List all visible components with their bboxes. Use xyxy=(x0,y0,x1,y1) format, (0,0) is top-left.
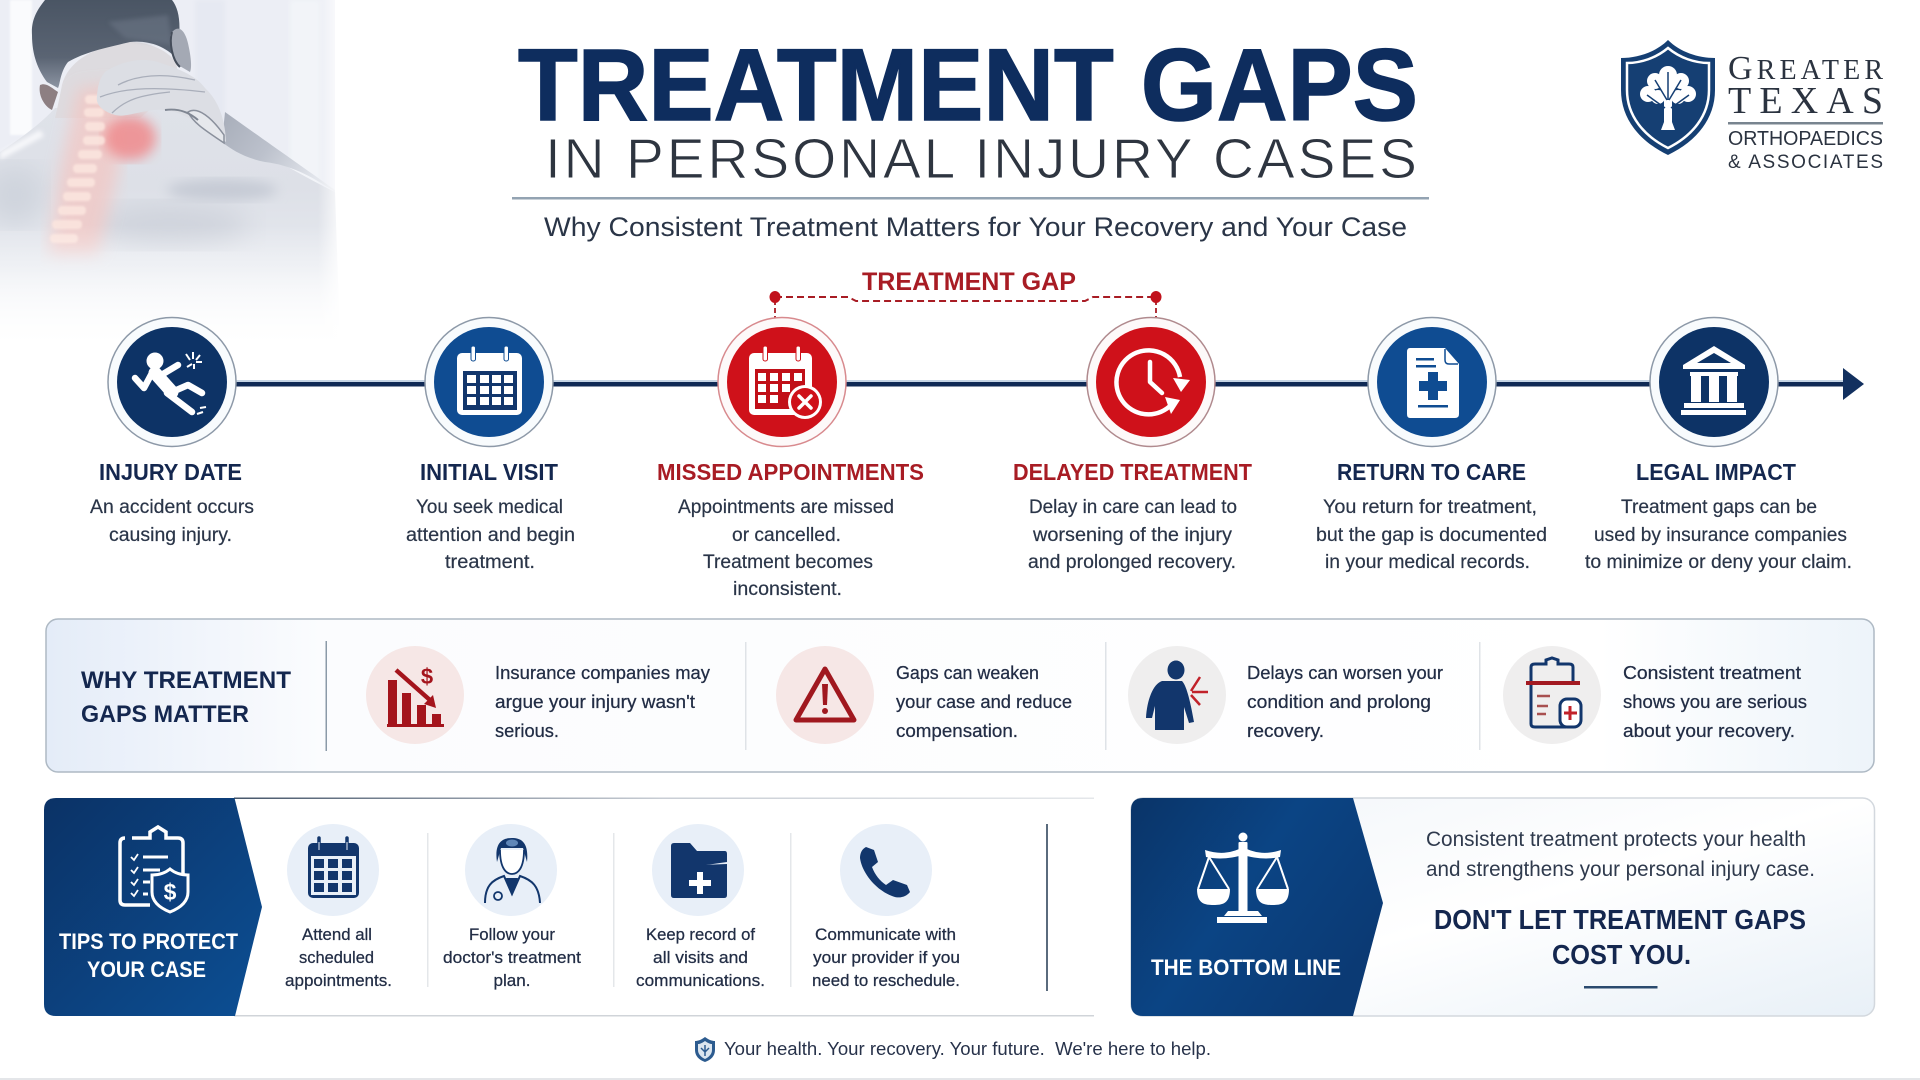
text: Insurance companies may xyxy=(495,662,711,683)
icon: clipboard with shield xyxy=(120,827,188,912)
icon: small shield xyxy=(695,1037,715,1062)
text xyxy=(1247,662,1443,741)
logo: Greater Texas Orthopaedics & Associates: & ASSOCIATES xyxy=(1728,152,1883,173)
step: injury date xyxy=(90,318,254,546)
text: scheduled xyxy=(299,948,374,967)
timeline line and arrow xyxy=(235,368,1864,400)
label: worsening of the injury xyxy=(1032,525,1233,546)
text: Delays can worsen your xyxy=(1247,662,1443,683)
text: Attend all xyxy=(302,925,372,944)
logo: Greater Texas Orthopaedics & Associates xyxy=(1621,40,1883,173)
icon: clipboard with shield: $ xyxy=(164,879,177,905)
label xyxy=(90,459,254,546)
text: and strengthens your personal injury case. xyxy=(1426,858,1815,881)
icon: calendar xyxy=(425,318,553,446)
label: DELAYED TREATMENT xyxy=(1013,459,1252,485)
icon: calendar xyxy=(287,824,379,916)
label xyxy=(406,459,575,573)
text: serious. xyxy=(495,720,559,741)
heading: GAPS MATTER xyxy=(81,701,249,728)
icon: scales of justice xyxy=(1197,832,1289,923)
text: all visits and xyxy=(653,948,748,967)
tagline: Why Consistent Treatment Matters for Your Recovery and Your Case xyxy=(544,212,1407,242)
text: shows you are serious xyxy=(1623,691,1807,712)
text: doctor's treatment xyxy=(443,948,581,967)
label: Appointments are missed xyxy=(678,497,894,518)
title rule xyxy=(512,197,1429,200)
logo: Greater Texas Orthopaedics & Associates: ORTHOPAEDICS xyxy=(1728,128,1883,150)
label: You seek medical xyxy=(416,497,563,518)
step: return to care xyxy=(1316,318,1547,573)
step: legal impact xyxy=(1585,318,1852,573)
label: You return for treatment, xyxy=(1323,497,1537,518)
subtitle: IN PERSONAL INJURY CASES xyxy=(545,127,1417,191)
text: Communicate with xyxy=(815,925,956,944)
text: Keep record of xyxy=(646,925,755,944)
text xyxy=(636,925,765,990)
text: compensation. xyxy=(896,720,1018,741)
panel: why treatment gaps matter xyxy=(46,619,1874,772)
text: your case and reduce xyxy=(896,691,1072,712)
icon: falling chart: $ xyxy=(421,664,433,689)
icon: falling person xyxy=(108,318,236,446)
label: or cancelled. xyxy=(732,525,841,546)
icon: clipboard with plus xyxy=(1503,646,1601,744)
label xyxy=(657,459,924,600)
heading: YOUR CASE xyxy=(87,957,206,982)
label: Delay in care can lead to xyxy=(1029,497,1237,518)
logo: Greater Texas Orthopaedics & Associates: TEXAS xyxy=(1728,80,1883,122)
text xyxy=(285,925,392,990)
label: Treatment gaps can be xyxy=(1621,497,1817,518)
heading: TIPS TO PROTECT xyxy=(59,929,239,954)
icon: calendar with x xyxy=(718,318,846,446)
text: Consistent treatment xyxy=(1623,662,1801,683)
heading: THE BOTTOM LINE xyxy=(1151,955,1341,980)
label: MISSED APPOINTMENTS xyxy=(657,459,924,485)
label: INITIAL VISIT xyxy=(420,459,558,485)
logo text: GREATER xyxy=(1728,50,1883,87)
label xyxy=(1316,459,1547,573)
text: about your recovery. xyxy=(1623,720,1795,741)
icon: doctor xyxy=(465,824,557,916)
step: initial visit xyxy=(406,318,575,573)
text xyxy=(1426,828,1815,881)
label: inconsistent. xyxy=(733,579,842,600)
text: condition and prolong xyxy=(1247,691,1431,712)
label: in your medical records. xyxy=(1325,552,1530,573)
label: and prolonged recovery. xyxy=(1028,552,1236,573)
icon: shield with tree xyxy=(1621,40,1715,155)
text xyxy=(896,662,1072,741)
icon: person in pain xyxy=(1128,646,1226,744)
text xyxy=(443,925,581,990)
text: Gaps can weaken xyxy=(896,662,1039,683)
label: INJURY DATE xyxy=(99,459,242,485)
text: recovery. xyxy=(1247,720,1324,741)
icon: clock with arrows xyxy=(1087,318,1215,446)
heading xyxy=(59,929,239,982)
icon: warning triangle xyxy=(776,646,874,744)
label: causing injury. xyxy=(109,525,232,546)
callout xyxy=(1434,904,1806,988)
label: to minimize or deny your claim. xyxy=(1585,552,1852,573)
step: missed appointments xyxy=(657,318,924,600)
text: appointments. xyxy=(285,971,392,990)
icon: phone xyxy=(840,824,932,916)
label: attention and begin xyxy=(406,525,575,546)
text: Consistent treatment protects your health xyxy=(1426,828,1806,851)
text xyxy=(1623,662,1807,741)
text: Follow your xyxy=(469,925,555,944)
callout: DON'T LET TREATMENT GAPS xyxy=(1434,904,1806,935)
title: TREATMENT GAPS xyxy=(518,28,1418,142)
treatment gap bracket xyxy=(770,268,1162,320)
panel: the bottom line xyxy=(1131,798,1874,1016)
text: need to reschedule. xyxy=(812,971,960,990)
label xyxy=(1013,459,1252,573)
text xyxy=(495,662,711,741)
label xyxy=(1585,459,1852,573)
heading: WHY TREATMENT xyxy=(81,667,291,694)
treatment gap bracket: TREATMENT GAP xyxy=(862,268,1076,296)
text xyxy=(812,925,960,990)
label: Treatment becomes xyxy=(703,552,873,573)
text: plan. xyxy=(494,971,530,990)
icon: medical folder xyxy=(652,824,744,916)
label: An accident occurs xyxy=(90,497,254,518)
icon: medical document xyxy=(1368,318,1496,446)
footer: Your health. Your recovery. Your future. We're here to help. xyxy=(724,1039,1211,1059)
text: communications. xyxy=(636,971,765,990)
panel: tips to protect your case xyxy=(44,798,1094,1016)
label: used by insurance companies xyxy=(1594,525,1847,546)
label: treatment. xyxy=(445,552,535,573)
label: LEGAL IMPACT xyxy=(1636,459,1796,485)
photo: man holding his neck with glowing spine xyxy=(0,0,336,290)
label: but the gap is documented xyxy=(1316,525,1547,546)
label: RETURN TO CARE xyxy=(1337,459,1526,485)
heading xyxy=(81,667,291,728)
icon: falling chart xyxy=(366,646,464,744)
icon: courthouse xyxy=(1650,318,1778,446)
text: argue your injury wasn't xyxy=(495,691,695,712)
step: delayed treatment xyxy=(1013,318,1252,573)
text: your provider if you xyxy=(813,948,960,967)
callout: COST YOU. xyxy=(1552,939,1691,970)
